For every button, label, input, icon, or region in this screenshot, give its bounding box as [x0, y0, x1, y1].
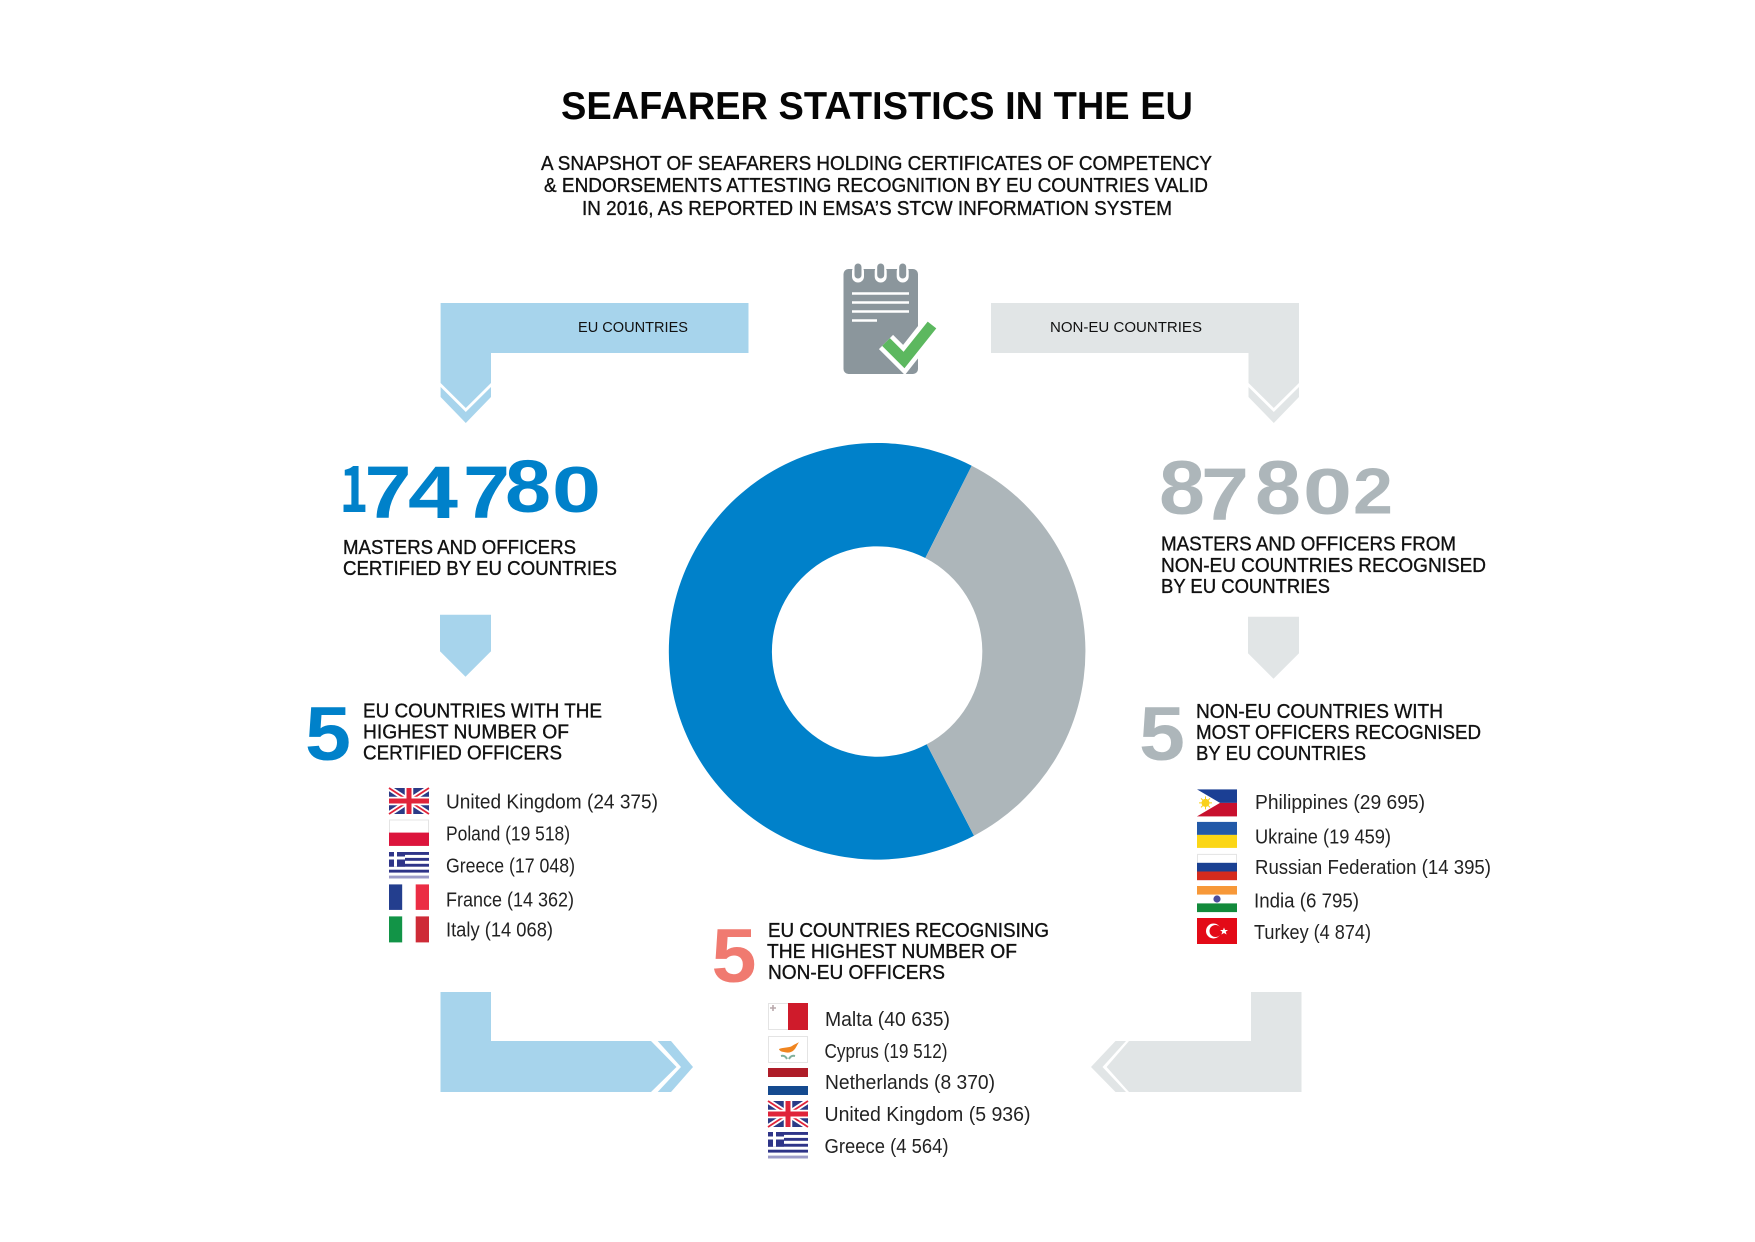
list item: Greece: Greece (17 048)	[446, 856, 575, 878]
list item: Italy: Italy (14 068)	[446, 920, 553, 942]
label: non-EU masters and officers: MASTERS AND OFFICERS FROM	[1161, 534, 1456, 556]
heading: non-EU top five: MOST OFFICERS RECOGNISED	[1196, 722, 1481, 744]
list item: Turkey: Turkey (4 874)	[1254, 922, 1371, 944]
heading: non-EU top five: NON-EU COUNTRIES WITH	[1196, 701, 1443, 723]
list item: United Kingdom: United Kingdom (24 375)	[446, 792, 658, 814]
list item: Poland	[389, 820, 570, 846]
list item: Philippines	[1197, 789, 1425, 816]
panel: non-EU countries	[1139, 446, 1491, 944]
arrow: EU countries banner: EU COUNTRIES	[578, 320, 688, 336]
list item: Philippines: Philippines (29 695)	[1255, 792, 1425, 814]
big number: EU total: 8	[505, 445, 551, 528]
big number: EU total: 0	[552, 453, 601, 526]
heading: EU top five: CERTIFIED OFFICERS	[363, 743, 562, 765]
subtitle text block: IN 2016, AS REPORTED IN EMSA’S STCW INFORMATION SYSTEM	[582, 198, 1172, 220]
list item: United Kingdom	[768, 1101, 1030, 1127]
label: EU masters and officers	[343, 537, 617, 580]
label: EU masters and officers: MASTERS AND OFFICERS	[343, 537, 576, 559]
list item: India	[1197, 886, 1359, 912]
label: non-EU masters and officers	[1161, 534, 1486, 598]
list item: Greece	[389, 852, 575, 878]
heading: EU top five: EU COUNTRIES WITH THE	[363, 700, 602, 722]
big number: EU total: 7	[364, 451, 412, 534]
arrow: EU bottom connector	[440, 992, 693, 1092]
list item: Russian Federation	[1197, 854, 1491, 880]
list item: Malta	[768, 1003, 950, 1031]
big number: non-EU total: 8	[1255, 446, 1301, 531]
label: non-EU masters and officers: BY EU COUNTRIES	[1161, 576, 1330, 598]
list item: Netherlands: Netherlands (8 370)	[825, 1072, 995, 1094]
icon: notepad with check mark	[844, 264, 932, 374]
heading: recognising countries	[767, 920, 1049, 984]
arrow: down to EU top five	[440, 615, 491, 677]
heading: EU top five: HIGHEST NUMBER OF	[363, 722, 569, 744]
donut chart	[669, 443, 1085, 860]
panel: EU countries recognising non-EU officers	[712, 914, 1049, 1158]
subtitle text block: & ENDORSEMENTS ATTESTING RECOGNITION BY EU COUNTRIES VALID	[544, 175, 1208, 197]
list item: Malta: Malta (40 635)	[825, 1009, 950, 1031]
big number: EU total: 1	[340, 440, 368, 530]
list item: United Kingdom	[389, 788, 658, 814]
arrow: non-EU countries banner	[991, 303, 1299, 423]
big number: non-EU total: 0	[1303, 455, 1352, 528]
label: non-EU masters and officers: NON-EU COUNTRIES RECOGNISED	[1161, 555, 1486, 577]
arrow: EU countries banner	[441, 303, 748, 423]
big five: EU: 5	[305, 692, 351, 777]
heading: recognising countries: THE HIGHEST NUMBER OF	[767, 941, 1017, 963]
panel: EU countries	[305, 440, 658, 942]
arrow: down to non-EU top five	[1248, 617, 1299, 679]
list item: Greece: Greece (4 564)	[824, 1136, 948, 1158]
list item: Russian Federation: Russian Federation (14 395)	[1255, 857, 1491, 879]
big number: EU total: 4	[408, 451, 458, 534]
big number: non-EU total: 2	[1353, 454, 1393, 528]
list item: Cyprus	[768, 1036, 948, 1063]
big number: non-EU total: 8	[1159, 446, 1205, 531]
subtitle text block: A SNAPSHOT OF SEAFARERS HOLDING CERTIFICATES OF COMPETENCY	[541, 153, 1212, 175]
subtitle text block	[541, 153, 1212, 220]
list item: France	[389, 884, 574, 911]
big number: non-EU total: 7	[1201, 453, 1249, 536]
title: SEAFARER STATISTICS IN THE EU	[561, 85, 1193, 128]
big number: EU total: 7	[463, 451, 510, 534]
list item: Netherlands	[768, 1068, 995, 1095]
arrow: non-EU countries banner: NON-EU COUNTRIES	[1050, 320, 1202, 336]
label: EU masters and officers: CERTIFIED BY EU COUNTRIES	[343, 558, 617, 580]
list item: Poland: Poland (19 518)	[446, 824, 570, 846]
list item: France: France (14 362)	[446, 889, 574, 911]
list item: Ukraine	[1197, 822, 1391, 848]
donut slice: non-EU countries	[925, 466, 1085, 836]
list item: Italy	[389, 916, 553, 942]
list item: Ukraine: Ukraine (19 459)	[1255, 826, 1391, 848]
list item: Greece	[768, 1132, 948, 1158]
heading: non-EU top five	[1196, 701, 1481, 765]
heading: recognising countries: EU COUNTRIES RECOGNISING	[768, 920, 1049, 942]
list item: United Kingdom: United Kingdom (5 936)	[824, 1104, 1030, 1126]
list item: Cyprus: Cyprus (19 512)	[824, 1041, 948, 1063]
heading: non-EU top five: BY EU COUNTRIES	[1196, 743, 1366, 765]
list item: Turkey	[1197, 918, 1371, 944]
big five: recognising countries: 5	[712, 914, 756, 999]
arrow: non-EU bottom connector	[1091, 992, 1302, 1092]
heading: EU top five	[363, 700, 602, 765]
heading: recognising countries: NON-EU OFFICERS	[768, 962, 945, 984]
list item: India: India (6 795)	[1254, 890, 1359, 912]
donut slice: EU countries	[669, 443, 974, 860]
big five: non-EU: 5	[1139, 692, 1185, 777]
